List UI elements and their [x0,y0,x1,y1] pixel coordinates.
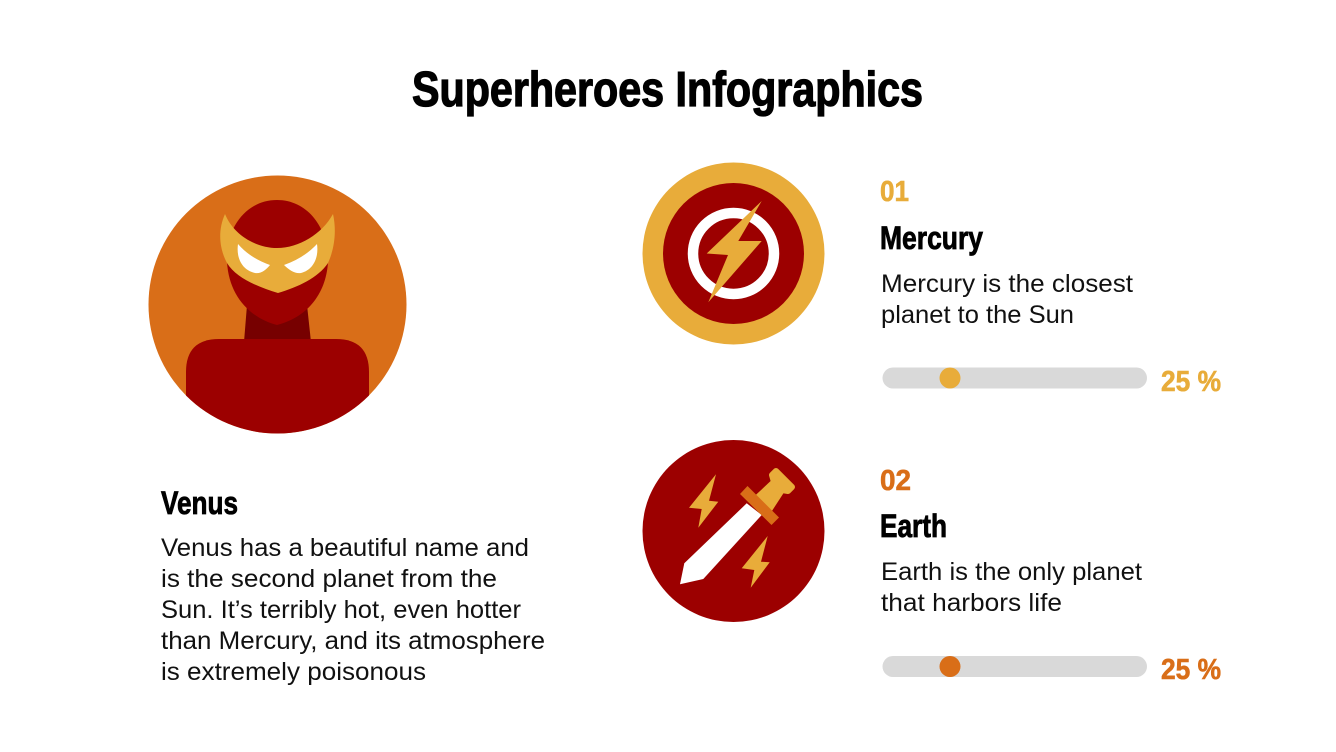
text block: Earth description: that harbors life [881,589,1062,617]
icon: sword and lightning [642,440,824,622]
progress bar: 25% [882,656,1147,677]
text block: Venus description [161,534,545,686]
text block: Mercury description: planet to the Sun [881,301,1074,329]
heading: Earth: Earth [880,508,947,544]
text block: Venus description: is extremely poisonous [161,658,426,686]
panel: Mercury item [642,162,1221,398]
value: 25 %: 25 % [1161,366,1221,398]
text block: Mercury description [881,270,1133,329]
text block: Venus description: than Mercury, and its atmosphere [161,627,545,655]
number: 01: 01 [880,176,909,208]
panel: Earth item [642,440,1221,686]
text block: Venus description: is the second planet from the [161,565,497,593]
icon: lightning shield [642,162,824,344]
number: 02: 02 [880,465,911,497]
icon: masked hero avatar [148,176,406,440]
title: Superheroes Infographics [412,63,923,117]
heading: Mercury: Mercury [880,220,983,256]
text block: Mercury description: Mercury is the closest [881,270,1133,298]
text block: Earth description [881,558,1142,617]
text block: Venus description: Sun. It’s terribly hot, even hotter [161,596,521,624]
progress bar: 25% [882,368,1147,388]
value: 25 %: 25 % [1161,654,1221,686]
text block: Earth description: Earth is the only planet [881,558,1142,586]
heading: Venus: Venus [161,485,238,521]
text block: Venus description: Venus has a beautiful name and [161,534,529,562]
panel: Venus hero [148,176,545,686]
